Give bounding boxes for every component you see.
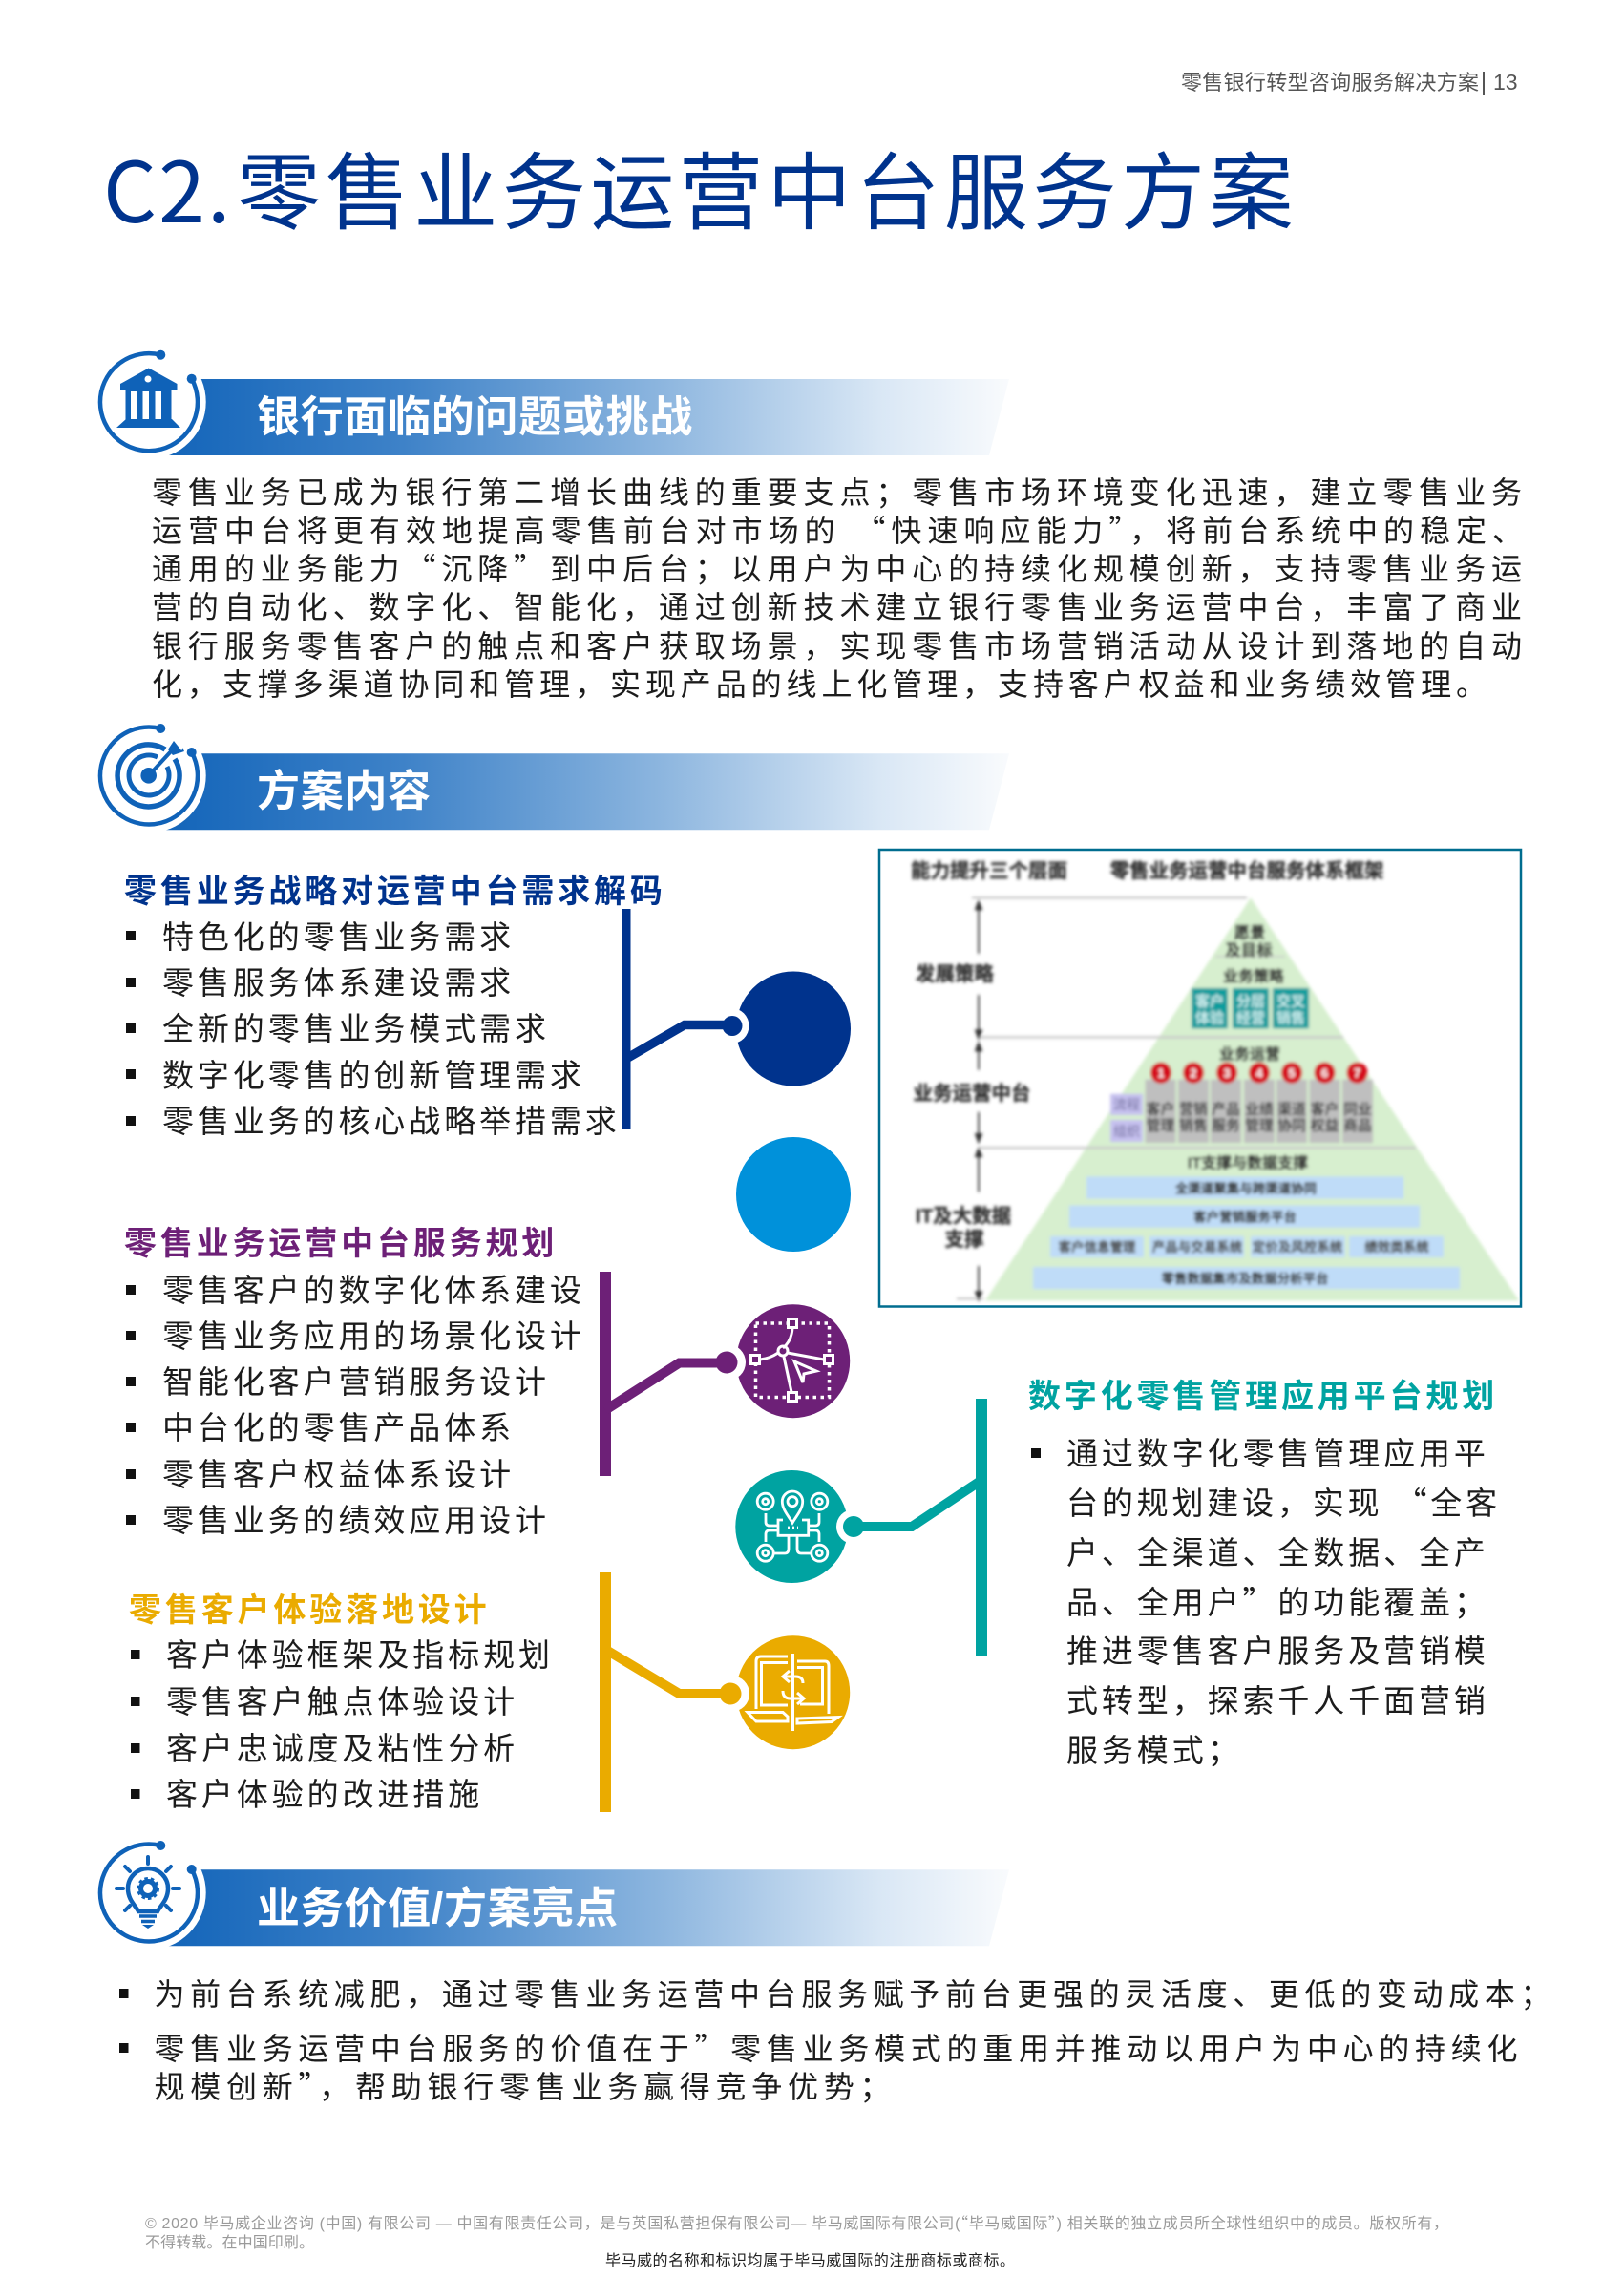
value bullets: 零售业务运营中台服务的价值在于”零售业务模式的重用并推动以用户为中心的持续化 [155, 2025, 1518, 2069]
pyramid framework panel [879, 850, 1521, 1306]
page header: 13 [1493, 70, 1518, 95]
bullet list [126, 919, 621, 1139]
strategy layer: 分层 [1236, 994, 1265, 1010]
circle: gold node with laptop icon [713, 1635, 850, 1749]
operations layer: 管理 [1147, 1117, 1174, 1134]
bullet list: 客户体验框架及指标规划 [166, 1637, 554, 1673]
banner heading: 方案内容 [257, 767, 432, 815]
value bullets [119, 1977, 1550, 2107]
problem paragraph: 运营中台将更有效地提高零售前台对市场的 “快速响应能力”，将前台系统中的稳定、 [152, 507, 1523, 551]
operations layer: 管理 [1245, 1117, 1274, 1134]
strategy layer: 体验 [1195, 1009, 1224, 1026]
IT and data layer: 客户营销服务平台 [1193, 1210, 1297, 1225]
level labels: 业务运营中台 [914, 1082, 1030, 1105]
digital platform block [1028, 1379, 1501, 1768]
operations layer: 服务 [1212, 1117, 1240, 1134]
operations layer: 2 [1190, 1066, 1197, 1081]
heading: 数字化零售管理应用平台规划 [1028, 1379, 1498, 1415]
level labels: IT及大数据 [916, 1206, 1011, 1228]
icon: target [100, 724, 198, 824]
service planning block [124, 1226, 585, 1538]
bullet list: 零售业务的核心战略举措需求 [162, 1104, 621, 1139]
strategy layer: 客户 [1195, 993, 1224, 1010]
bullet text: 通过数字化零售管理应用平 [1066, 1436, 1489, 1471]
banner heading: 银行面临的问题或挑战 [257, 392, 693, 441]
connector: gold [600, 1572, 741, 1812]
bullet list: 客户忠诚度及粘性分析 [166, 1731, 518, 1766]
bullet text: 品、全用户”的功能覆盖； [1066, 1577, 1489, 1623]
icon: location platform [757, 1491, 828, 1561]
problem paragraph: 通用的业务能力“沉降”到中后台；以用户为中心的持续化规模创新，支持零售业务运 [152, 545, 1522, 589]
connector: purple [600, 1272, 737, 1476]
panel titles: 能力提升三个层面 [911, 860, 1067, 882]
connector: teal [843, 1399, 987, 1656]
connector: blue [622, 909, 743, 1129]
section banner: value [92, 1835, 1009, 1950]
section banner: challenges [92, 345, 1009, 459]
bullet text: 户、全渠道、全数据、全产 [1066, 1535, 1489, 1571]
bullet text: 式转型，探索千人千面营销 [1066, 1683, 1489, 1719]
footer legal text: 毕马威的名称和标识均属于毕马威国际的注册商标或商标。 [605, 2252, 1015, 2269]
section banner: solution [92, 718, 1009, 833]
operations layer: 组织 [1113, 1124, 1140, 1139]
level separators [957, 897, 1416, 1298]
strategy layer: 愿景 [1234, 924, 1265, 942]
bullet list [131, 1637, 554, 1812]
operations layer: 7 [1354, 1066, 1360, 1081]
banner heading: 业务价值/方案亮点 [257, 1884, 619, 1932]
bullet list: 数字化零售的创新管理需求 [162, 1058, 585, 1093]
operations layer: 6 [1321, 1066, 1328, 1081]
pyramid background [985, 897, 1519, 1300]
title: C2. [103, 126, 232, 247]
circle: purple node with network icon [709, 1304, 850, 1418]
level arrows [976, 901, 981, 1299]
level labels: 支撑 [945, 1229, 983, 1251]
operations layer: 流程 [1113, 1097, 1140, 1112]
icon: light bulb [100, 1841, 198, 1941]
operations layer: 客户 [1311, 1101, 1339, 1118]
operations layer [1110, 1044, 1373, 1143]
operations layer: 客户 [1147, 1101, 1174, 1118]
customer experience block [129, 1592, 554, 1812]
bullet list: 零售客户的数字化体系建设 [162, 1273, 585, 1308]
operations layer: 1 [1157, 1066, 1165, 1081]
value bullets: 规模创新”，帮助银行零售业务赢得竞争优势； [155, 2063, 890, 2107]
operations layer: 业务运营 [1219, 1044, 1280, 1064]
strategy layer: 及目标 [1225, 941, 1273, 960]
bullet list: 零售客户触点体验设计 [166, 1684, 518, 1719]
IT and data layer: 绩效类系统 [1364, 1239, 1429, 1255]
operations layer: 协同 [1277, 1118, 1306, 1134]
operations layer: 产品 [1212, 1102, 1240, 1118]
problem paragraph: 银行服务零售客户的触点和客户获取场景，实现零售市场营销活动从设计到落地的自动 [152, 629, 1522, 664]
bullet text [1031, 1436, 1501, 1768]
IT and data layer: 客户信息管理 [1059, 1239, 1136, 1255]
IT and data layer: 零售数据集市及数据分析平台 [1161, 1271, 1329, 1286]
bullet list: 智能化客户营销服务设计 [162, 1364, 550, 1400]
operations layer: 渠道 [1277, 1101, 1306, 1118]
panel titles [911, 859, 1383, 882]
strategy decoding block [124, 874, 666, 1139]
heading: 零售业务战略对运营中台需求解码 [124, 874, 666, 910]
icon: bank [100, 350, 198, 451]
IT and data layer: 定价及风控系统 [1253, 1239, 1343, 1255]
page header: 零售银行转型咨询服务解决方案 [1181, 71, 1479, 95]
bullet text: 台的规划建设，实现 “全客 [1066, 1478, 1501, 1524]
strategy layer: 交叉 [1276, 993, 1305, 1010]
operations layer: 营销 [1179, 1101, 1208, 1118]
circle: light blue node [736, 1137, 851, 1252]
operations layer: 3 [1223, 1066, 1231, 1081]
operations layer: 权益 [1311, 1117, 1339, 1134]
bullet text: 服务模式； [1066, 1733, 1243, 1768]
value bullets: 为前台系统减肥，通过零售业务运营中台服务赋予前台更强的灵活度、更低的变动成本； [155, 1977, 1550, 2012]
bullet list: 全新的零售业务模式需求 [162, 1011, 550, 1046]
strategy layer [1192, 924, 1309, 1028]
IT and data layer: 产品与交易系统 [1152, 1239, 1243, 1255]
bullet list: 客户体验的改进措施 [166, 1777, 483, 1812]
bullet list: 零售服务体系建设需求 [162, 965, 515, 1001]
problem paragraph: 零售业务已成为银行第二增长曲线的重要支点；零售市场环境变化迅速，建立零售业务 [152, 475, 1522, 510]
panel titles: 零售业务运营中台服务体系框架 [1110, 859, 1383, 882]
strategy layer: 销售 [1276, 1009, 1305, 1026]
heading: 零售业务运营中台服务规划 [124, 1226, 558, 1262]
footer legal text: © 2020 毕马威企业咨询 (中国) 有限公司 — 中国有限责任公司，是与英国私营担保有限公司— 毕马威国际有限公司(“毕马威国际”) 相关联的独立成员所全球性组织中的成员。版权所有， [145, 2210, 1448, 2233]
title: 零售业务运营中台服务方案 [237, 146, 1297, 241]
bullet text: 推进零售客户服务及营销模 [1066, 1634, 1489, 1669]
operations layer: 同业 [1343, 1102, 1372, 1118]
bullet list: 特色化的零售业务需求 [162, 919, 515, 955]
icon: laptops with sync arrows [748, 1654, 838, 1731]
level labels: 发展策略 [916, 962, 994, 985]
strategy layer: 经营 [1236, 1009, 1265, 1026]
footer legal text [145, 2210, 1448, 2269]
level labels [914, 962, 1030, 1251]
heading: 零售客户体验落地设计 [129, 1592, 491, 1629]
bullet list: 零售客户权益体系设计 [162, 1457, 515, 1492]
problem paragraph: 化，支撑多渠道协同和管理，实现产品的线上化管理，支持客户权益和业务绩效管理。 [152, 667, 1487, 702]
IT and data layer: 全渠道聚集与跨渠道协同 [1175, 1180, 1317, 1196]
circle: teal node with location platform icon [735, 1470, 871, 1583]
bullet list [126, 1273, 585, 1538]
footer legal text: 不得转载。在中国印刷。 [145, 2234, 314, 2251]
operations layer: 5 [1288, 1066, 1296, 1081]
operations layer: 4 [1255, 1066, 1263, 1081]
bullet list: 零售业务应用的场景化设计 [162, 1318, 585, 1354]
circle: dark blue node [714, 972, 851, 1086]
operations layer: 业绩 [1245, 1101, 1274, 1118]
bullet list: 中台化的零售产品体系 [162, 1410, 515, 1445]
operations layer: 销售 [1179, 1117, 1208, 1134]
operations layer: 商品 [1343, 1117, 1372, 1134]
bullet list: 零售业务的绩效应用设计 [162, 1503, 550, 1538]
strategy layer: 业务策略 [1223, 967, 1284, 985]
IT and data layer [1033, 1153, 1460, 1289]
problem paragraph [152, 475, 1523, 702]
IT and data layer: IT支撑与数据支撑 [1188, 1153, 1308, 1171]
problem paragraph: 营的自动化、数字化、智能化，通过创新技术建立银行零售业务运营中台，丰富了商业 [152, 590, 1522, 624]
icon: network cursor [750, 1319, 833, 1402]
